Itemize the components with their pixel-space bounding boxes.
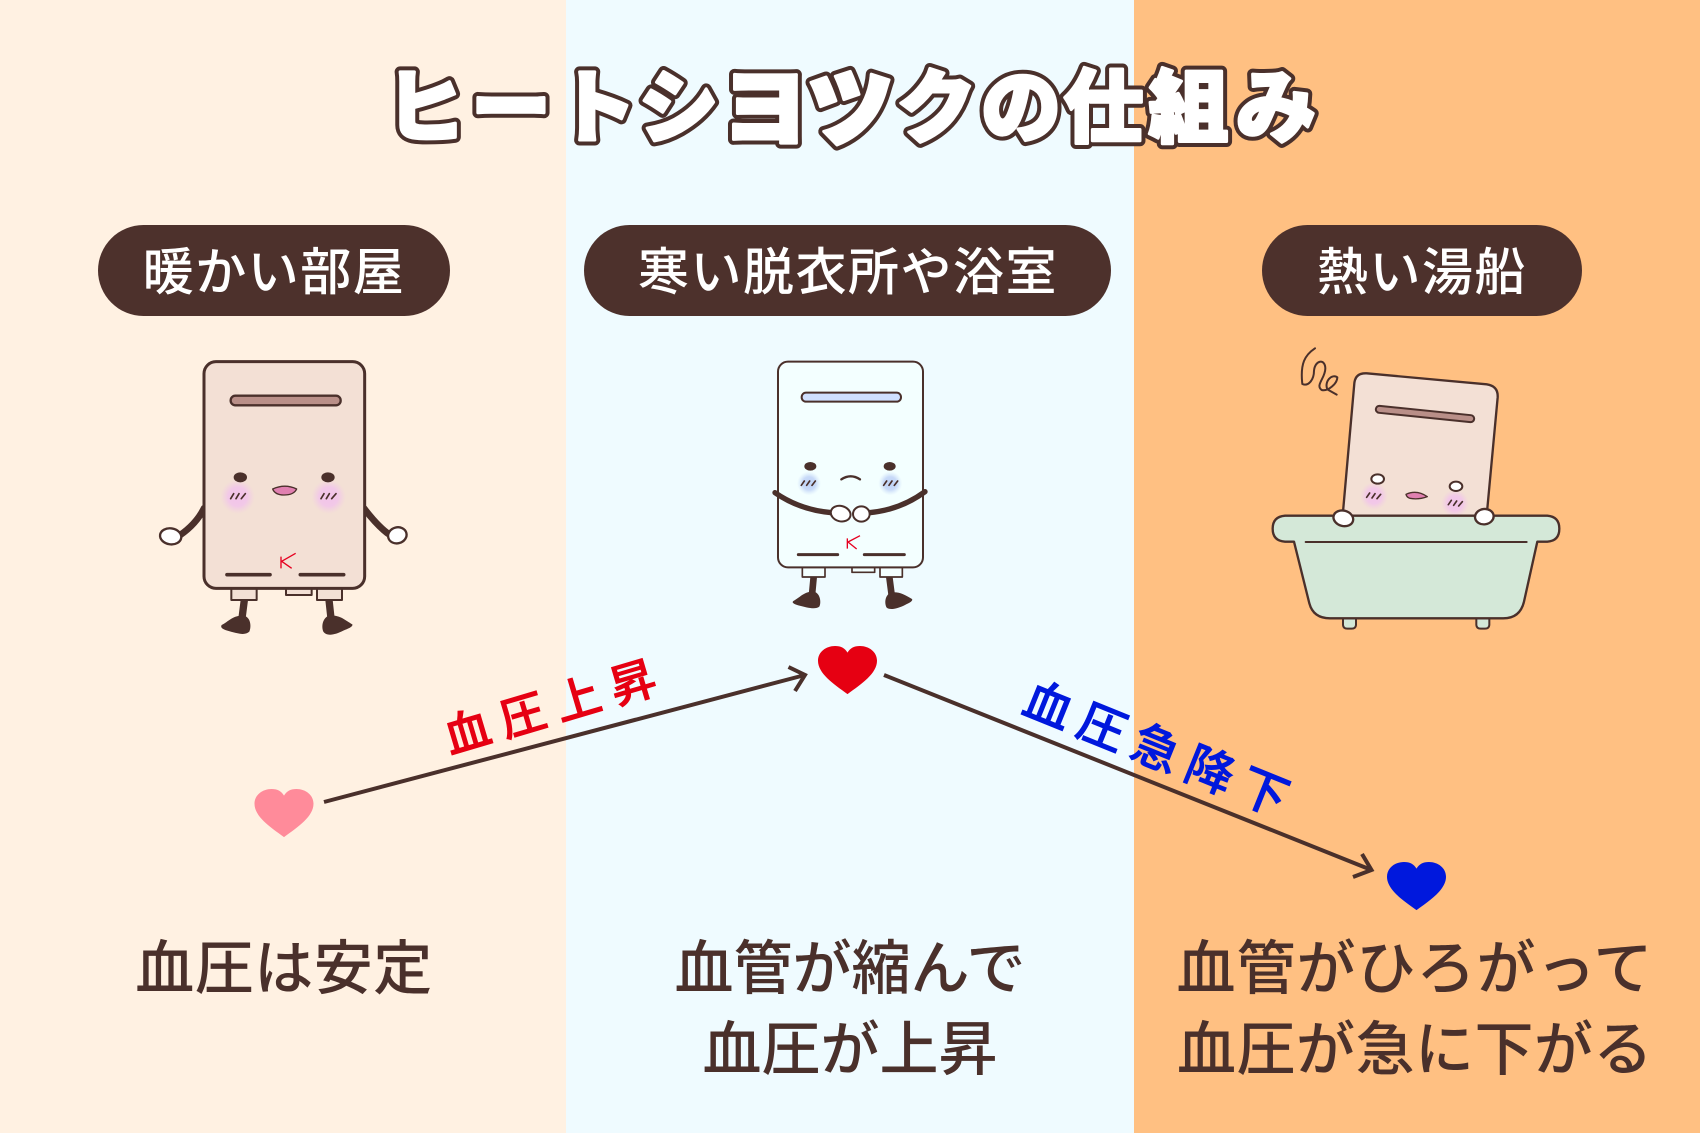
left fitting: [802, 567, 825, 577]
center fitting: [852, 567, 875, 572]
left shoe: [793, 592, 820, 608]
right hand: [853, 506, 870, 522]
title: み: [1236, 64, 1316, 153]
right leg: [889, 577, 892, 595]
right fitting: [317, 588, 342, 600]
title: 組: [1148, 64, 1228, 153]
frowning mouth: [841, 476, 860, 479]
cheek marks: [801, 481, 898, 485]
title: ク: [896, 64, 976, 153]
heart: stable blood pressure: [254, 789, 314, 837]
title: ク: [896, 64, 976, 153]
title: ヒ: [386, 64, 466, 153]
title: ョ: [713, 41, 817, 157]
heading: hot bathtub: [1262, 225, 1582, 316]
cheek marks: [1367, 493, 1462, 506]
right eye: [1450, 482, 1462, 491]
mouth: [273, 486, 297, 495]
caption: vessels dilate: 血管がひろがって: [1176, 936, 1654, 1002]
panel: hot bathtub background: [1134, 0, 1700, 1133]
heater body: [778, 362, 923, 567]
heater body: [1343, 373, 1498, 516]
title: ト: [556, 64, 636, 153]
character: relaxed water heater in warm room: [159, 362, 408, 635]
center fitting: [286, 588, 312, 595]
heater body: [204, 362, 365, 588]
right fitting: [880, 567, 902, 577]
heading: warm room: 暖かい部屋: [143, 244, 405, 301]
title: ー: [471, 64, 551, 153]
left shoe: [221, 616, 250, 634]
label: blood pressure rise: 血圧上昇: [438, 648, 673, 764]
left blush: [797, 471, 821, 495]
left hand: [159, 527, 182, 546]
title: の: [981, 64, 1061, 153]
left arm: [179, 508, 204, 536]
right blush: [1441, 489, 1469, 517]
logo mark: [281, 553, 296, 568]
display bar: [802, 393, 901, 402]
title: 仕: [1064, 64, 1144, 153]
right hand: [1474, 508, 1495, 526]
tub feet: [1343, 617, 1489, 629]
arrow: blood pressure falls: [884, 675, 1372, 877]
title: シ: [638, 64, 718, 153]
title: ー: [471, 64, 551, 153]
left blush: [1360, 482, 1388, 510]
left leg: [242, 600, 244, 618]
title: 組: [1148, 64, 1228, 153]
display bar: [231, 396, 341, 405]
display bar: [1379, 409, 1471, 419]
hugging arms: [775, 492, 925, 513]
dizzy squiggle: [1302, 348, 1337, 395]
cheek marks: [231, 494, 336, 499]
title: ヒ: [386, 64, 466, 153]
title: [386, 41, 1316, 157]
caption: vessels constrict: 血管が縮んで: [674, 936, 1026, 1002]
left leg: [812, 577, 814, 595]
bathtub: [1273, 516, 1559, 618]
title: シ: [638, 64, 718, 153]
caption: vessels constrict: [674, 936, 1026, 1083]
title: み: [1236, 64, 1316, 153]
panel: cold changing room background: [566, 0, 1134, 1133]
right shoe: [885, 592, 912, 609]
eyes: [804, 462, 896, 471]
title: の: [981, 64, 1061, 153]
vent lines: [227, 569, 344, 580]
panel: warm room background: [0, 0, 566, 1133]
left hand: [1332, 508, 1355, 528]
title: 仕: [1064, 64, 1144, 153]
eyes: [234, 472, 335, 482]
left eye: [1371, 474, 1384, 484]
tub rim line: [1306, 539, 1527, 545]
character: shivering water heater in cold room: [775, 362, 925, 609]
left hand: [829, 504, 852, 524]
label: sudden blood pressure drop: 血圧急降下: [1016, 673, 1305, 831]
caption: vessels constrict: 血圧が上昇: [702, 1017, 998, 1083]
caption: vessels dilate: 血圧が急に下がる: [1177, 1017, 1653, 1083]
caption: vessels dilate: [1176, 936, 1654, 1083]
logo mark: [847, 536, 860, 549]
right leg: [329, 600, 331, 618]
caption: stable: 血圧は安定: [135, 936, 433, 1002]
heading: cold changing room: [584, 225, 1111, 316]
right blush: [311, 479, 346, 514]
vent lines: [798, 550, 904, 559]
heading: hot bathtub: 熱い湯船: [1317, 244, 1527, 301]
title: ッ: [796, 41, 901, 157]
right blush: [878, 471, 902, 495]
character: dizzy water heater in bathtub: [1273, 348, 1559, 629]
heading: warm room: [98, 225, 450, 316]
left blush: [220, 479, 255, 514]
title: ッ: [796, 41, 901, 157]
title: ト: [556, 64, 636, 153]
heading: cold changing room: 寒い脱衣所や浴室: [638, 244, 1058, 301]
left fitting: [231, 588, 257, 600]
heart: high blood pressure: [818, 646, 877, 694]
heart: low blood pressure: [1387, 862, 1446, 910]
right shoe: [322, 615, 352, 635]
title: ョ: [713, 41, 817, 157]
mouth: [1406, 492, 1427, 499]
right hand: [386, 525, 408, 545]
arrow: blood pressure rises: [324, 667, 805, 802]
right arm: [364, 508, 390, 535]
